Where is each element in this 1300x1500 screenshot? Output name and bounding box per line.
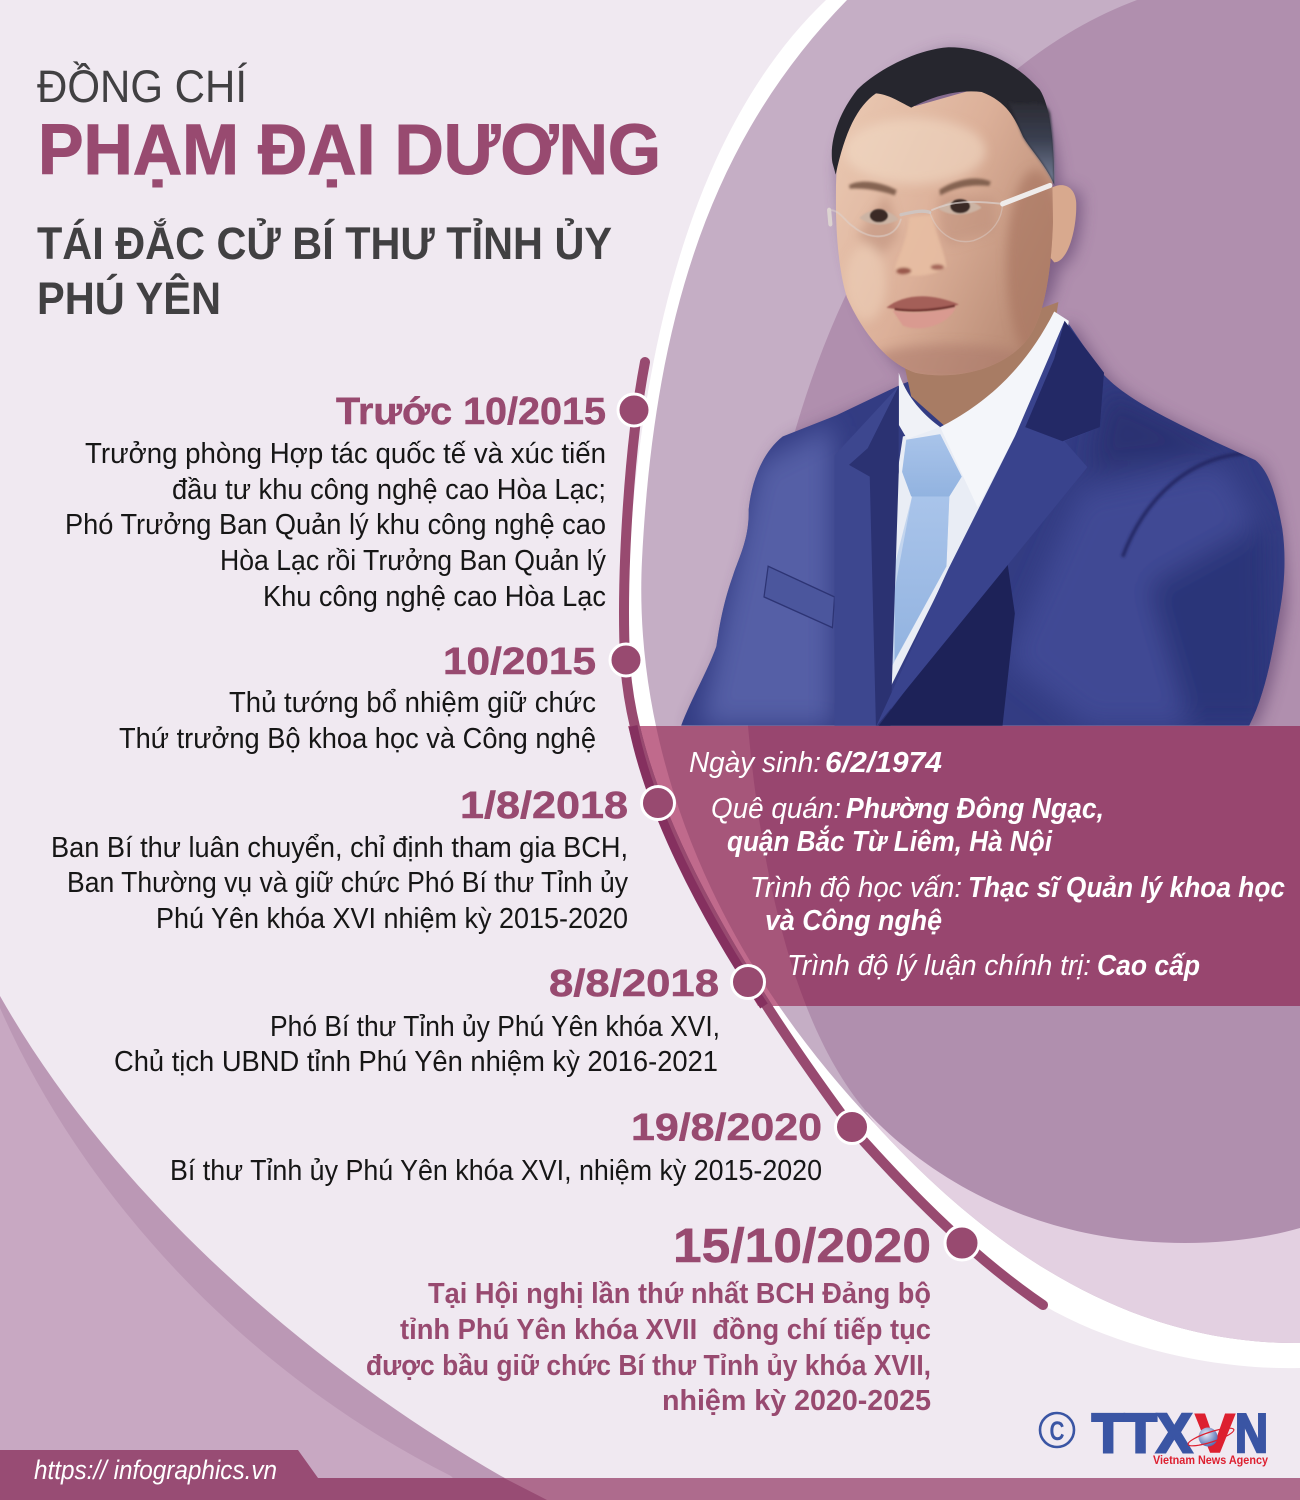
mouth: [886, 296, 959, 328]
hometown: Phường Đông Ngạc,: [846, 793, 1104, 825]
info box text: [689, 747, 1285, 982]
timeline entry: before 10/2015: [65, 391, 606, 613]
title: [37, 61, 661, 324]
description: [65, 438, 606, 613]
pocket flap: [764, 566, 834, 628]
description: Trưởng phòng Hợp tác quốc tế và xúc tiến: [85, 438, 606, 470]
description: tỉnh Phú Yên khóa XVII đồng chí tiếp tục: [400, 1314, 931, 1346]
hair: [832, 47, 1054, 185]
agency letters: TTX: [1092, 1402, 1192, 1464]
line segment inside info box: [633, 726, 764, 1006]
portrait shadow: [687, 51, 1287, 730]
title line: subtitle 1: TÁI ĐẮC CỬ BÍ THƯ TỈNH ỦY: [37, 218, 612, 269]
political theory: Trình độ lý luận chính trị:: [787, 950, 1091, 982]
agency letters: V: [1195, 1402, 1235, 1464]
panel: bottom-left curved shapes: [0, 996, 547, 1500]
left lapel: [834, 386, 899, 727]
description: Phú Yên khóa XVI nhiệm kỳ 2015-2020: [156, 903, 628, 935]
description: Thứ trưởng Bộ khoa học và Công nghệ: [119, 723, 596, 755]
description: Phó Bí thư Tỉnh ủy Phú Yên khóa XVI,: [270, 1011, 720, 1043]
description: Thủ tướng bổ nhiệm giữ chức: [229, 687, 596, 719]
face: [828, 80, 1065, 382]
education: [750, 872, 1285, 937]
description: [114, 1011, 720, 1078]
timeline entry: 19/8/2020: [170, 1107, 822, 1187]
suit highlights: [700, 387, 1272, 727]
nose: [895, 215, 946, 276]
description: Hòa Lạc rồi Trưởng Ban Quản lý: [220, 545, 606, 577]
hometown: Quê quán:: [711, 793, 841, 825]
timeline entry: 10/2015: [119, 641, 596, 755]
sleeve crease: [1123, 453, 1255, 557]
left collar: [899, 373, 940, 439]
neck: [903, 302, 1058, 429]
agency letters: [1092, 1402, 1268, 1464]
eyebrows: [849, 179, 991, 195]
shirt: [892, 312, 1069, 685]
hometown: [711, 793, 1104, 858]
portrait photo: [675, 47, 1297, 730]
title line: name: PHẠM ĐẠI DƯƠNG: [38, 111, 661, 190]
description: [51, 832, 628, 935]
panel: bottom bar: [0, 1450, 1300, 1500]
text: website url: https:// infographics.vn: [34, 1455, 277, 1485]
date of birth: [689, 747, 942, 779]
panel: light purple disc: [641, 0, 1300, 1343]
date of birth: Ngày sinh:: [689, 747, 821, 779]
timeline line: [624, 362, 1043, 1305]
eyes: [859, 199, 982, 225]
tie: [892, 434, 962, 665]
coat centre shadow: [878, 557, 1015, 727]
education: và Công nghệ: [765, 905, 942, 937]
description: Khu công nghệ cao Hòa Lạc: [263, 581, 606, 613]
logo: TTXVN copyright: [1040, 1402, 1268, 1467]
description: Phó Trưởng Ban Quản lý khu công nghệ cao: [65, 509, 606, 541]
right lapel: [876, 321, 1104, 727]
date: 8/8/2018: [549, 963, 719, 1005]
hair temple: [1009, 101, 1054, 185]
panel: personal info box: [628, 726, 1300, 1006]
face shading: [845, 118, 1065, 382]
timeline entry: 15/10/2020: [366, 1220, 931, 1417]
ear: [1048, 185, 1076, 262]
description: [119, 687, 596, 755]
timeline entry: 8/8/2018: [114, 963, 720, 1078]
description: được bầu giữ chức Bí thư Tỉnh ủy khóa XVII,: [366, 1350, 931, 1382]
description: đầu tư khu công nghệ cao Hòa Lạc;: [172, 474, 606, 506]
description: [366, 1278, 931, 1417]
icon: copyright mark: C: [1050, 1416, 1064, 1446]
timeline dots: [610, 394, 979, 1260]
suit jacket: [675, 311, 1297, 727]
education: Trình độ học vấn:: [750, 872, 962, 904]
date: 19/8/2020: [631, 1107, 822, 1149]
description: Ban Bí thư luân chuyển, chỉ định tham gia BCH,: [51, 832, 628, 864]
timeline entry: 1/8/2018: [51, 785, 628, 935]
date: 15/10/2020: [673, 1220, 931, 1273]
date of birth: 6/2/1974: [825, 747, 942, 779]
icon: globe: [1187, 1425, 1235, 1449]
description: nhiệm kỳ 2020-2025: [662, 1385, 931, 1417]
agency tagline: Vietnam News Agency: [1153, 1453, 1268, 1467]
panel: dark purple blob: [748, 0, 1300, 1243]
description: Tại Hội nghị lần thứ nhất BCH Đảng bộ: [428, 1278, 931, 1310]
date: 1/8/2018: [460, 785, 628, 827]
glasses: [829, 185, 1050, 242]
description: Chủ tịch UBND tỉnh Phú Yên nhiệm kỳ 2016-2021: [114, 1046, 718, 1078]
date: 10/2015: [443, 641, 596, 683]
political theory: Cao cấp: [1097, 950, 1200, 982]
agency letters: N: [1235, 1402, 1268, 1464]
right collar: [940, 311, 1069, 507]
title line: eyebrow: ĐỒNG CHÍ: [37, 61, 247, 112]
hometown: quận Bắc Từ Liêm, Hà Nội: [727, 824, 1053, 858]
description: Ban Thường vụ và giữ chức Phó Bí thư Tỉnh ủy: [67, 867, 628, 899]
date: Trước 10/2015: [336, 391, 606, 433]
title line: subtitle 2: PHÚ YÊN: [37, 273, 221, 324]
description: Bí thư Tỉnh ủy Phú Yên khóa XVI, nhiệm kỳ 2015-2020: [170, 1155, 822, 1187]
panel: white swoosh: [625, 0, 1300, 1368]
icon: copyright mark: [1040, 1413, 1074, 1447]
panel: pale lower disc: [866, 1112, 1300, 1343]
